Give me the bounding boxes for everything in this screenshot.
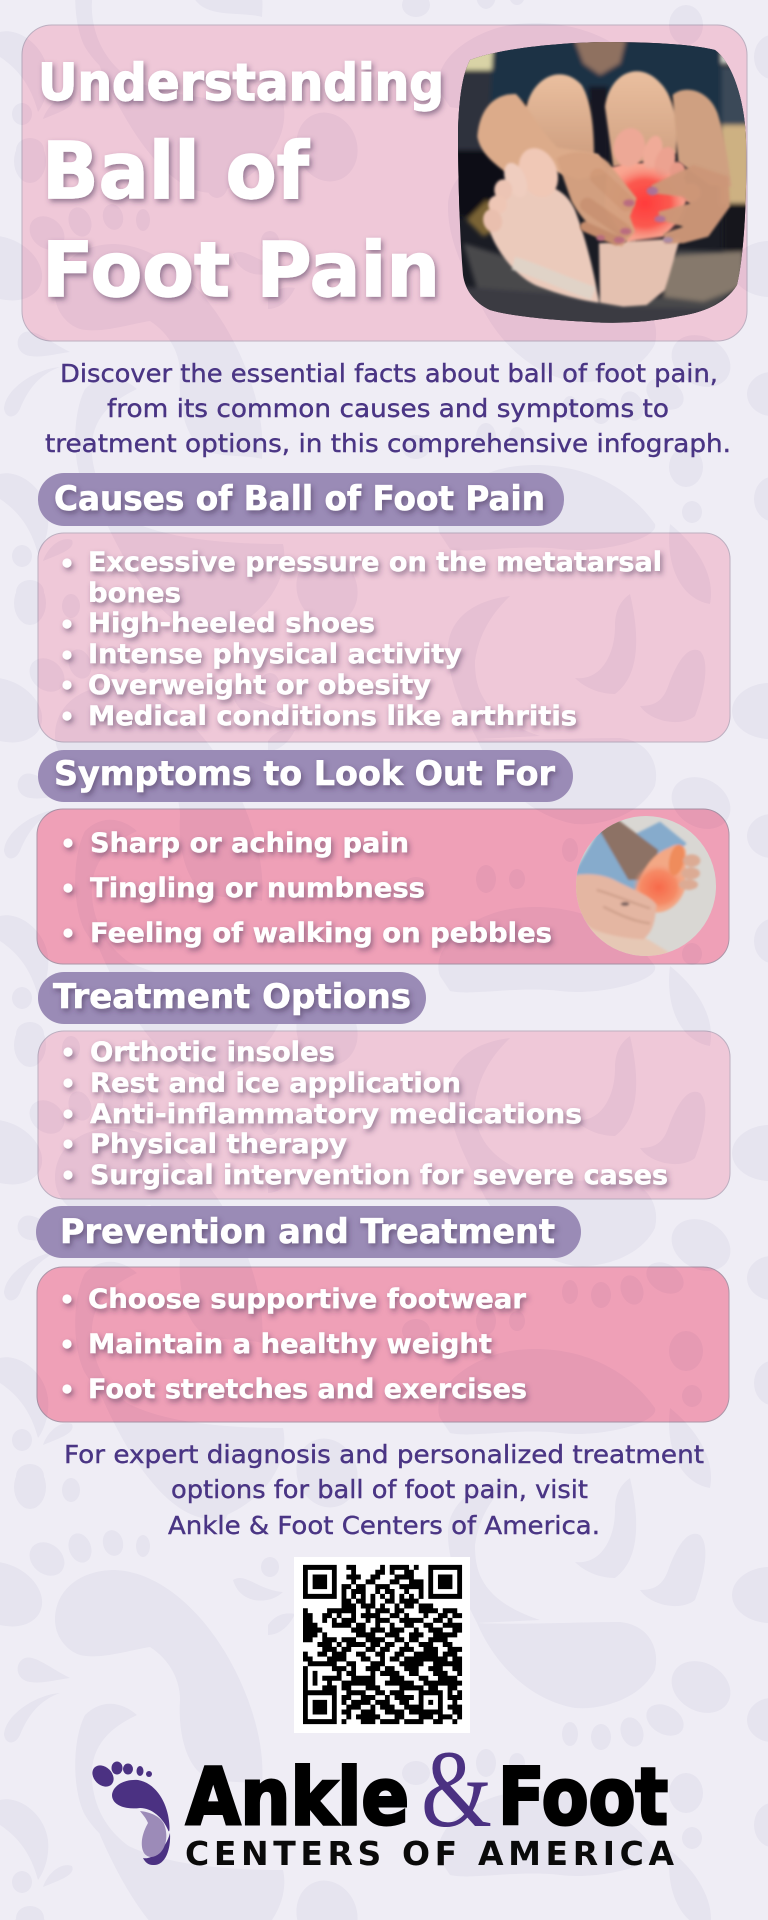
heading: symptoms: Symptoms to Look Out For xyxy=(54,754,555,794)
intro text: Discover the essential facts about ball of foot pain, xyxy=(60,359,718,388)
title: Understanding xyxy=(38,54,444,113)
panel: prevention xyxy=(37,1267,729,1422)
panel: causes xyxy=(38,533,730,742)
QR code xyxy=(294,1557,470,1733)
closing text: Ankle & Foot Centers of America. xyxy=(168,1511,600,1540)
list item: tingling: Tingling or numbness xyxy=(90,873,425,904)
list item: footwear: Choose supportive footwear xyxy=(88,1284,526,1315)
heading: prevention: Prevention and Treatment xyxy=(60,1212,555,1252)
list item: high heels: High-heeled shoes xyxy=(88,608,375,639)
photo: hands holding painful foot xyxy=(450,30,750,330)
list item: surgery: Surgical intervention for severe cases xyxy=(90,1160,668,1191)
intro text: from its common causes and symptoms to xyxy=(107,394,669,423)
title xyxy=(38,54,444,314)
wordmark: Foot: Foot xyxy=(498,1753,668,1843)
wordmark: Centers of America: CENTERS OF AMERICA xyxy=(185,1834,674,1873)
list item: medications: Anti-inflammatory medications xyxy=(90,1099,582,1130)
list item: pebbles: Feeling of walking on pebbles xyxy=(90,918,552,949)
list item: therapy: Physical therapy xyxy=(90,1129,347,1160)
intro text xyxy=(45,359,731,458)
wordmark: ampersand: & xyxy=(421,1728,492,1850)
heading: causes: Causes of Ball of Foot Pain xyxy=(54,479,545,519)
title: Foot Pain xyxy=(42,225,440,314)
intro text: treatment options, in this comprehensive infograph. xyxy=(45,429,731,458)
closing text xyxy=(64,1440,704,1540)
title: Ball of xyxy=(42,127,310,217)
list item: stretches: Foot stretches and exercises xyxy=(88,1374,527,1405)
photo: foot held in hands xyxy=(576,816,716,956)
list item: weight: Overweight or obesity xyxy=(88,670,431,701)
list item: activity: Intense physical activity xyxy=(88,639,462,670)
icon: footprint xyxy=(88,1761,170,1865)
list item: weight: Maintain a healthy weight xyxy=(88,1329,492,1360)
list item: insoles: Orthotic insoles xyxy=(90,1037,335,1068)
list item: excessive pressure: bones xyxy=(88,578,181,609)
heading: treatment options: Treatment Options xyxy=(53,977,411,1017)
wordmark: Ankle: Ankle xyxy=(186,1753,409,1843)
closing text: For expert diagnosis and personalized treatment xyxy=(64,1440,704,1469)
closing text: options for ball of foot pain, visit xyxy=(171,1475,588,1504)
panel: treatment options xyxy=(38,1031,730,1199)
list item: rest and ice: Rest and ice application xyxy=(90,1068,461,1099)
logo: Ankle & Foot Centers of America xyxy=(88,1728,674,1873)
list item: excessive pressure: Excessive pressure on the metatarsal xyxy=(88,547,662,578)
list item: excessive pressure xyxy=(62,547,662,609)
panel: hero header xyxy=(22,25,750,341)
list item: sharp pain: Sharp or aching pain xyxy=(90,828,409,859)
panel: symptoms xyxy=(37,809,729,964)
list item: medical conditions: Medical conditions like arthritis xyxy=(88,701,577,732)
